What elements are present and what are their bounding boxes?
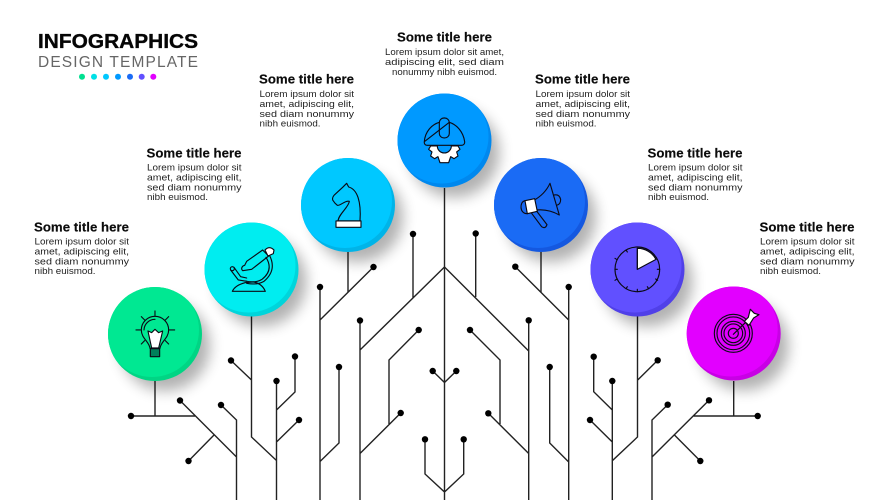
text block: step 7: Some title here xyxy=(760,220,854,234)
icon: chess knight xyxy=(333,183,361,227)
text block: step 2: sed diam nonummy xyxy=(147,182,242,192)
icon: megaphone xyxy=(521,183,561,228)
text block: step 7 xyxy=(760,220,855,276)
panel: step 2 cyan circle xyxy=(202,218,306,326)
text block: step 4: Lorem ipsum dolor sit amet, xyxy=(385,47,504,57)
text block: step 3: sed diam nonummy xyxy=(260,109,354,119)
text block: step 1: nibh euismod. xyxy=(34,266,96,276)
text block: step 5 xyxy=(535,72,630,128)
text block: step 5: Some title here xyxy=(535,72,630,86)
text block: step 4 xyxy=(385,30,504,77)
text block: step 2: nibh euismod. xyxy=(147,192,208,202)
text block: step 5: amet, adipiscing elit, xyxy=(536,99,630,109)
title: infographics design template xyxy=(38,31,198,80)
text block: step 7: nibh euismod. xyxy=(760,266,821,276)
text block: step 4: adipiscing elit, sed diam xyxy=(385,57,504,67)
text block: step 6: sed diam nonummy xyxy=(648,182,743,192)
text block: step 2: amet, adipiscing elit, xyxy=(147,172,242,182)
text block: step 7: amet, adipiscing elit, xyxy=(760,246,854,256)
text block: step 5: sed diam nonummy xyxy=(536,109,630,119)
text block: step 3: Lorem ipsum dolor sit xyxy=(260,89,354,99)
text block: step 3 xyxy=(259,72,354,128)
text block: step 5: Lorem ipsum dolor sit xyxy=(536,89,630,99)
text block: step 1 xyxy=(34,220,129,276)
text block: step 7: sed diam nonummy xyxy=(760,256,855,266)
text block: step 6 xyxy=(648,146,743,202)
text block: step 6: Some title here xyxy=(648,146,742,160)
text block: step 3: amet, adipiscing elit, xyxy=(260,99,354,109)
text block: step 1: Lorem ipsum dolor sit xyxy=(34,236,129,246)
text block: step 2: Some title here xyxy=(146,146,242,160)
icon: microscope xyxy=(230,248,274,291)
icon: helmet with gear xyxy=(424,118,465,163)
text block: step 3: Some title here xyxy=(259,72,354,86)
text block: step 2: Lorem ipsum dolor sit xyxy=(147,162,242,172)
text block: step 7: Lorem ipsum dolor sit xyxy=(760,236,855,246)
text block: step 6: Lorem ipsum dolor sit xyxy=(648,162,743,172)
icon: target with arrow xyxy=(714,309,759,352)
text block: step 1: sed diam nonummy xyxy=(34,256,129,266)
panel: step 5 royal blue circle xyxy=(491,154,596,262)
panel: step 7 magenta circle xyxy=(684,282,789,390)
panel: step 3 sky blue circle xyxy=(298,154,403,262)
text block: step 1: Some title here xyxy=(34,220,129,234)
title: infographics design template: DESIGN TEMPLATE xyxy=(38,54,198,71)
panel: step 1 green circle xyxy=(105,283,210,391)
panel: step 6 purple circle xyxy=(588,218,692,326)
icon: clock xyxy=(615,247,660,292)
circuit tree lines xyxy=(128,188,761,500)
text block: step 4: Some title here xyxy=(397,30,492,44)
text block: step 5: nibh euismod. xyxy=(536,118,596,128)
panel: step 4 blue circle xyxy=(394,90,500,198)
text block: step 6: amet, adipiscing elit, xyxy=(648,172,742,182)
text block: step 2 xyxy=(146,146,242,202)
text block: step 4: nonummy nibh euismod. xyxy=(392,67,497,77)
text block: step 3: nibh euismod. xyxy=(260,118,320,128)
icon: light bulb xyxy=(136,311,175,357)
title: infographics design template: INFOGRAPHICS xyxy=(38,31,198,53)
text block: step 1: amet, adipiscing elit, xyxy=(34,246,129,256)
text block: step 6: nibh euismod. xyxy=(648,192,709,202)
